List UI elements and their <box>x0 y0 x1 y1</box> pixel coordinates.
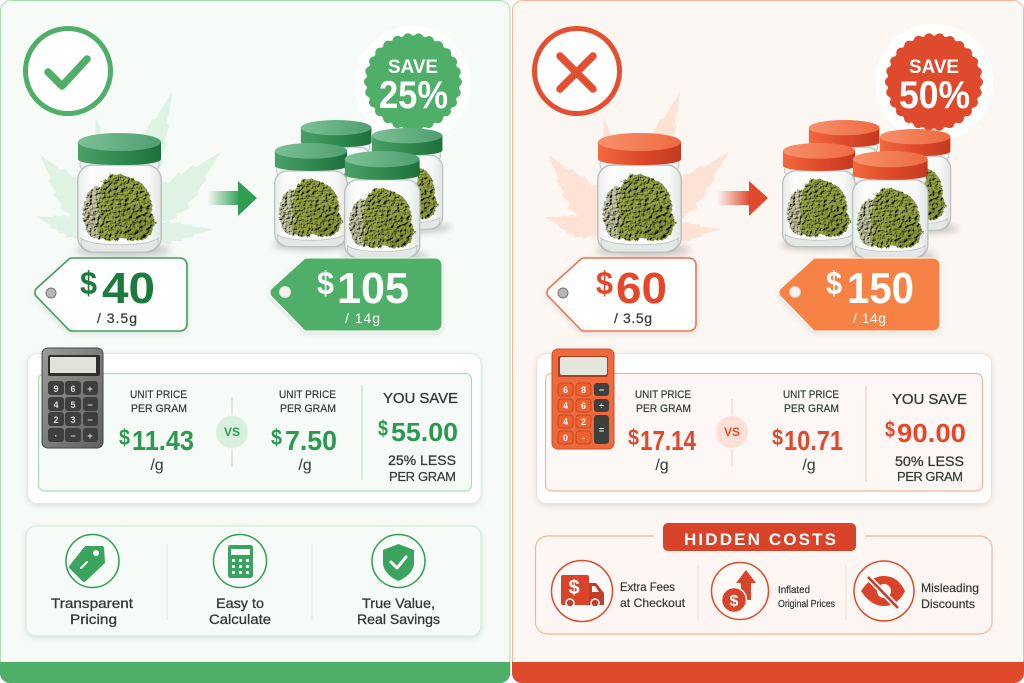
label: easy to calculate: Easy to <box>216 595 264 611</box>
icon: calculator orange: 6 <box>563 385 568 395</box>
price tag: $105: $ <box>317 265 334 301</box>
versus badge red <box>716 399 748 467</box>
icon: calculator orange <box>552 349 614 449</box>
label: true value: Real Savings <box>357 611 440 627</box>
label: easy to calculate: Calculate <box>209 611 271 627</box>
icon: calculator orange: 0 <box>563 433 568 443</box>
unit price: before red: 17.14 <box>640 425 696 456</box>
price tag: $105: 105 <box>337 264 409 313</box>
unit price: after red: PER GRAM <box>784 403 839 415</box>
icon: calculator: − <box>70 431 76 441</box>
save badge: 25% <box>355 26 471 142</box>
price tag: $150: 150 <box>847 264 914 313</box>
unit price: before red: /g <box>655 457 669 474</box>
price tag: $60: / 3.5g <box>614 310 652 326</box>
icon: calculator orange: 8 <box>581 385 586 395</box>
panel: unit price comparison <box>28 348 481 504</box>
icon: calculator orange: 2 <box>581 417 586 427</box>
heading: hidden costs <box>663 523 856 551</box>
unit price: after: $ <box>271 425 282 450</box>
icon: calculator: 6 <box>70 384 76 394</box>
price tag: $60: 60 <box>616 264 667 313</box>
icon: calculator: − <box>87 415 93 425</box>
price tag: $150: $ <box>826 265 842 301</box>
you save: PER GRAM <box>389 469 456 484</box>
price tag: $60 <box>547 258 696 331</box>
icon: calculator: · <box>54 431 58 441</box>
unit price: after red: 10.71 <box>784 425 843 456</box>
you save red: PER GRAM <box>897 469 963 484</box>
icon: calculator orange: - <box>582 433 585 443</box>
you save red <box>885 391 967 484</box>
panel: bad deal <box>512 0 1024 683</box>
icon: cannabis leaf <box>26 86 234 248</box>
unit price: after red: UNIT PRICE <box>783 389 839 401</box>
unit price: before: UNIT PRICE <box>130 389 187 401</box>
price tag: $40: / 3.5g <box>97 310 137 326</box>
icon: calculator small <box>214 534 266 588</box>
versus badge <box>216 397 248 467</box>
price tag: $40: 40 <box>102 264 155 313</box>
icon: calculator orange: ÷ <box>599 401 604 411</box>
footer bar: green <box>0 662 510 683</box>
unit price: before: PER GRAM <box>131 403 187 415</box>
price tag: $150 <box>779 258 940 331</box>
icon: check mark <box>26 28 110 114</box>
unit price: after: UNIT PRICE <box>279 389 336 401</box>
versus badge red: VS <box>724 425 740 439</box>
unit price: after red <box>772 389 843 474</box>
save badge: 50%: 50% <box>899 74 970 117</box>
unit price: before red <box>628 389 696 474</box>
icon: calculator orange: 4 <box>563 417 568 427</box>
icon: calculator: 5 <box>70 400 76 410</box>
you save red: YOU SAVE <box>892 391 967 408</box>
icon: cross mark <box>534 28 620 114</box>
label: misleading discounts: Discounts <box>921 597 975 611</box>
icon: calculator: 9 <box>53 384 59 394</box>
footer bar: red <box>512 662 1024 683</box>
label: inflated prices <box>778 585 835 610</box>
unit price: before: $ <box>119 425 130 450</box>
price tag: $150: / 14g <box>853 310 886 326</box>
icon: inflated price <box>712 562 768 620</box>
icon: calculator <box>42 348 103 448</box>
label: true value <box>357 595 440 627</box>
icon: inflated price: $ <box>730 593 739 610</box>
unit price: after: 7.50 <box>285 425 337 456</box>
panel: good deal <box>0 0 510 683</box>
label: extra fees: at Checkout <box>620 596 686 610</box>
you save: $ <box>378 416 388 441</box>
arrow red <box>717 181 768 216</box>
unit price: after: /g <box>298 457 312 474</box>
you save red: 50% LESS <box>895 453 964 469</box>
icon: delivery truck: $ <box>568 577 580 599</box>
icon: calculator: 4 <box>53 400 59 410</box>
price tag: $40 <box>35 258 187 331</box>
icon: calculator orange: 6 <box>581 401 586 411</box>
unit price: before <box>119 389 194 474</box>
unit price: after <box>271 389 337 474</box>
unit price: before red: UNIT PRICE <box>635 389 691 401</box>
icon: calculator orange: − <box>599 385 604 395</box>
unit price: before red: $ <box>628 425 639 450</box>
price tag: $40: $ <box>80 265 97 301</box>
label: transparent pricing: Transparent <box>51 595 133 611</box>
save badge: 50%: SAVE <box>909 57 959 78</box>
icon: crossed eye <box>854 561 914 621</box>
price tag: $105 <box>270 258 442 331</box>
unit price: before: /g <box>150 457 164 474</box>
icon: calculator orange: 4 <box>563 401 568 411</box>
jar group red <box>780 120 959 262</box>
price tag: $105: / 14g <box>345 310 380 326</box>
panel: benefits <box>26 526 481 636</box>
label: inflated prices: Inflated <box>778 585 810 596</box>
you save: YOU SAVE <box>383 390 458 407</box>
icon: price tag <box>66 534 119 588</box>
icon: calculator: 3 <box>70 415 76 425</box>
unit price: after: PER GRAM <box>280 403 336 415</box>
label: easy to calculate <box>209 595 271 627</box>
icon: cannabis leaf faded <box>534 86 742 248</box>
label: misleading discounts <box>921 581 979 611</box>
unit price: before: 11.43 <box>132 425 194 456</box>
label: transparent pricing <box>51 595 133 627</box>
label: inflated prices: Original Prices <box>778 599 835 610</box>
unit price: after red: $ <box>772 425 783 450</box>
you save: 25% LESS <box>388 452 456 468</box>
you save <box>378 390 458 484</box>
label: extra fees <box>620 580 686 610</box>
icon: delivery truck <box>552 560 612 622</box>
single jar <box>75 133 171 256</box>
unit price: before red: PER GRAM <box>636 403 691 415</box>
panel: unit price comparison red <box>536 349 992 504</box>
versus badge: VS <box>224 425 240 439</box>
icon: calculator: + <box>87 431 93 441</box>
unit price: after red: /g <box>802 457 816 474</box>
save badge: 25%: SAVE <box>388 57 438 78</box>
icon: calculator: − <box>87 400 93 410</box>
label: true value: True Value, <box>362 595 435 611</box>
label: extra fees: Extra Fees <box>620 580 675 594</box>
save badge: 25%: 25% <box>379 74 448 117</box>
heading: hidden costs: HIDDEN COSTS <box>684 530 836 549</box>
panel: hidden costs <box>536 523 992 634</box>
single jar red <box>595 133 691 256</box>
icon: shield <box>372 534 425 588</box>
arrow <box>207 181 257 216</box>
label: transparent pricing: Pricing <box>70 611 117 627</box>
jar group <box>272 120 451 262</box>
you save: 55.00 <box>391 417 458 447</box>
save badge: 50% <box>875 24 993 142</box>
icon: calculator: 2 <box>53 415 59 425</box>
label: misleading discounts: Misleading <box>921 581 979 595</box>
price tag: $60: $ <box>596 265 613 301</box>
icon: calculator: + <box>87 384 93 394</box>
you save red: 90.00 <box>897 418 966 448</box>
you save red: $ <box>885 417 895 442</box>
icon: calculator orange: = <box>599 425 604 435</box>
